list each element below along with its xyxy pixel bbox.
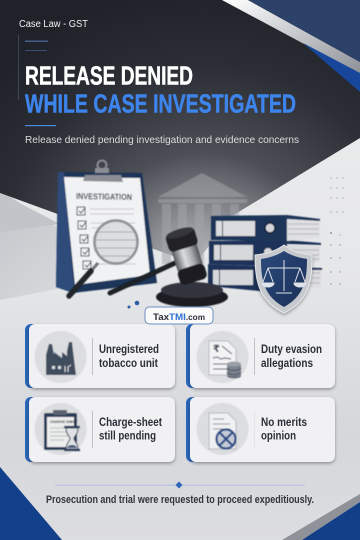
card label: Charge-sheet xyxy=(99,417,162,429)
accent dots xyxy=(128,301,139,308)
card label: No merits xyxy=(261,417,307,429)
dot grids xyxy=(330,177,344,285)
card: duty evasion allegations xyxy=(186,324,335,388)
title xyxy=(25,60,296,118)
clipboard clip xyxy=(83,160,123,182)
gavel handle xyxy=(110,263,175,293)
icon: clipboard and hourglass: CHARGE SHEET xyxy=(50,420,79,424)
top right corner accent xyxy=(222,0,360,92)
card label xyxy=(99,344,159,370)
card label: allegations xyxy=(261,358,313,370)
card label xyxy=(261,417,307,442)
card: unregistered tobacco unit xyxy=(25,324,175,388)
card label xyxy=(99,417,162,442)
title rule xyxy=(25,125,56,126)
subtitle: Release denied pending investigation and evidence concerns xyxy=(25,134,299,146)
icon: document with cross xyxy=(196,403,248,455)
card label: Unregistered xyxy=(99,344,159,356)
footer divider xyxy=(55,482,305,488)
gavel head xyxy=(164,225,209,286)
card: no merits opinion xyxy=(186,397,335,462)
card label: still pending xyxy=(99,430,156,442)
binder middle xyxy=(209,240,321,267)
gavel base xyxy=(156,282,228,307)
clipboard heading: INVESTIGATION xyxy=(76,191,132,202)
shield with scales xyxy=(255,245,312,313)
logo badge xyxy=(145,307,213,324)
bottom left corner accent xyxy=(0,467,62,540)
header accent lines xyxy=(18,35,48,100)
checklist xyxy=(77,207,136,269)
binder top xyxy=(211,215,320,241)
card label xyxy=(261,344,322,370)
courthouse backdrop xyxy=(158,173,247,264)
card label: opinion xyxy=(261,430,296,442)
card label: Duty evasion xyxy=(261,344,322,356)
gavel xyxy=(110,225,228,307)
card: charge-sheet still pending xyxy=(25,397,175,462)
bottom right corner accent xyxy=(282,494,360,540)
logo badge: TaxTMI.com xyxy=(153,312,205,323)
icon: factory xyxy=(34,331,86,383)
header label: Case Law - GST xyxy=(19,19,88,30)
card label: tobacco unit xyxy=(99,358,158,370)
binder bottom xyxy=(208,264,322,293)
clipboard xyxy=(56,160,157,293)
icon: clipboard and hourglass xyxy=(34,403,86,455)
icon: duty document with coins: ₹ xyxy=(213,344,220,355)
binders xyxy=(208,215,322,293)
scales of justice xyxy=(262,260,306,293)
icon: duty document with coins xyxy=(196,331,248,383)
magnifying glass xyxy=(69,220,138,296)
title: RELEASE DENIED xyxy=(25,60,193,90)
